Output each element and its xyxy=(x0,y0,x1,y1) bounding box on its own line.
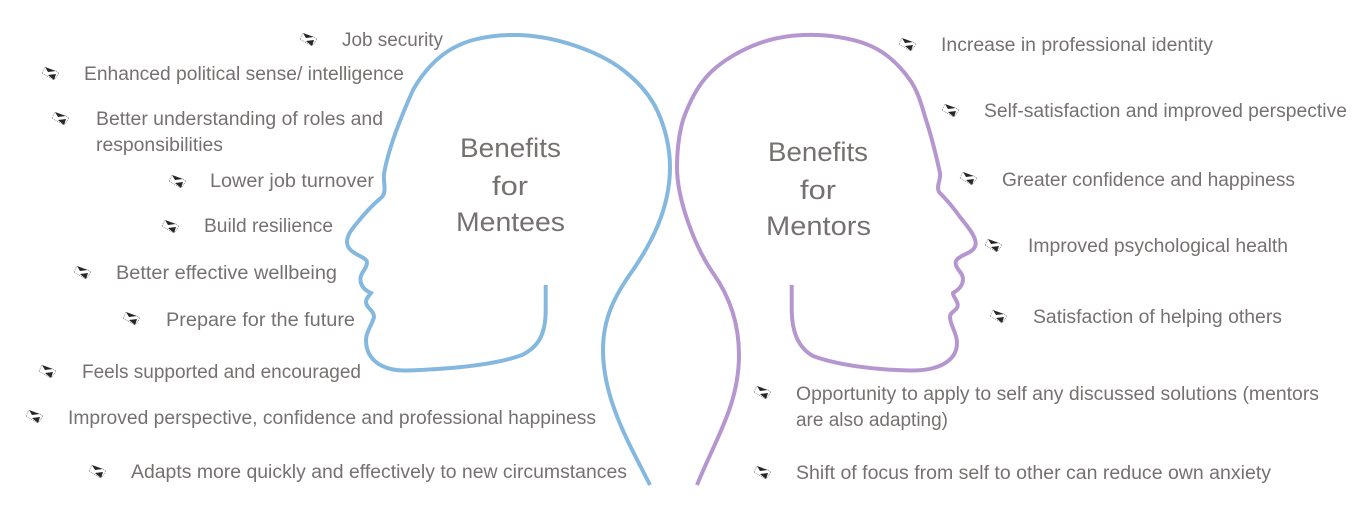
list item: better understanding of roles xyxy=(52,109,383,156)
list item: better effective wellbeing: Better effective wellbeing xyxy=(116,263,337,284)
list item: increase in professional identity: Increase in professional identity xyxy=(941,35,1214,56)
panel: benefits for mentors xyxy=(677,35,1347,485)
list item: feels supported and encouraged: Feels supported and encouraged xyxy=(82,362,361,383)
panel: benefits for mentees xyxy=(26,30,670,485)
list item: opportunity to apply solutions xyxy=(754,384,1319,431)
list item: better understanding of roles: Better understanding of roles and xyxy=(96,109,383,130)
heading: benefits for mentors: Benefits xyxy=(768,137,868,167)
heading: benefits for mentors: for xyxy=(800,175,836,205)
heading: benefits for mentees: Benefits xyxy=(460,133,561,163)
list item: satisfaction of helping others: Satisfaction of helping others xyxy=(1033,307,1282,328)
list item: opportunity to apply solutions: are also adapting) xyxy=(796,410,948,431)
list item: lower job turnover: Lower job turnover xyxy=(210,171,375,192)
list item: improved perspective, confidence: Improved perspective, confidence and professional happiness xyxy=(68,408,596,429)
list item: greater confidence: Greater confidence and happiness xyxy=(1002,170,1295,191)
icon: purple head outline xyxy=(677,35,976,485)
heading: benefits for mentees: for xyxy=(492,171,528,201)
list item: opportunity to apply solutions: Opportunity to apply to self any discussed solutions (mentors xyxy=(796,384,1319,405)
list item: self-satisfaction: Self-satisfaction and improved perspective xyxy=(984,101,1347,122)
heading: benefits for mentors xyxy=(766,137,871,241)
list item: build resilience: Build resilience xyxy=(204,216,333,237)
list item: enhanced political sense: Enhanced political sense/ intelligence xyxy=(84,64,404,85)
heading: benefits for mentees: Mentees xyxy=(456,207,565,237)
list item: better understanding of roles: responsibilities xyxy=(96,135,223,156)
list item: adapts more quickly: Adapts more quickly and effectively to new circumstances xyxy=(131,462,627,483)
icon: blue head outline xyxy=(347,35,670,485)
heading: benefits for mentors: Mentors xyxy=(766,211,871,241)
list item: shift of focus: Shift of focus from self to other can reduce own anxiety xyxy=(796,463,1272,484)
heading: benefits for mentees xyxy=(456,133,565,237)
list item: prepare for the future: Prepare for the future xyxy=(166,310,355,331)
list item: job security: Job security xyxy=(342,30,443,51)
list item: improved psychological health: Improved psychological health xyxy=(1028,236,1288,257)
